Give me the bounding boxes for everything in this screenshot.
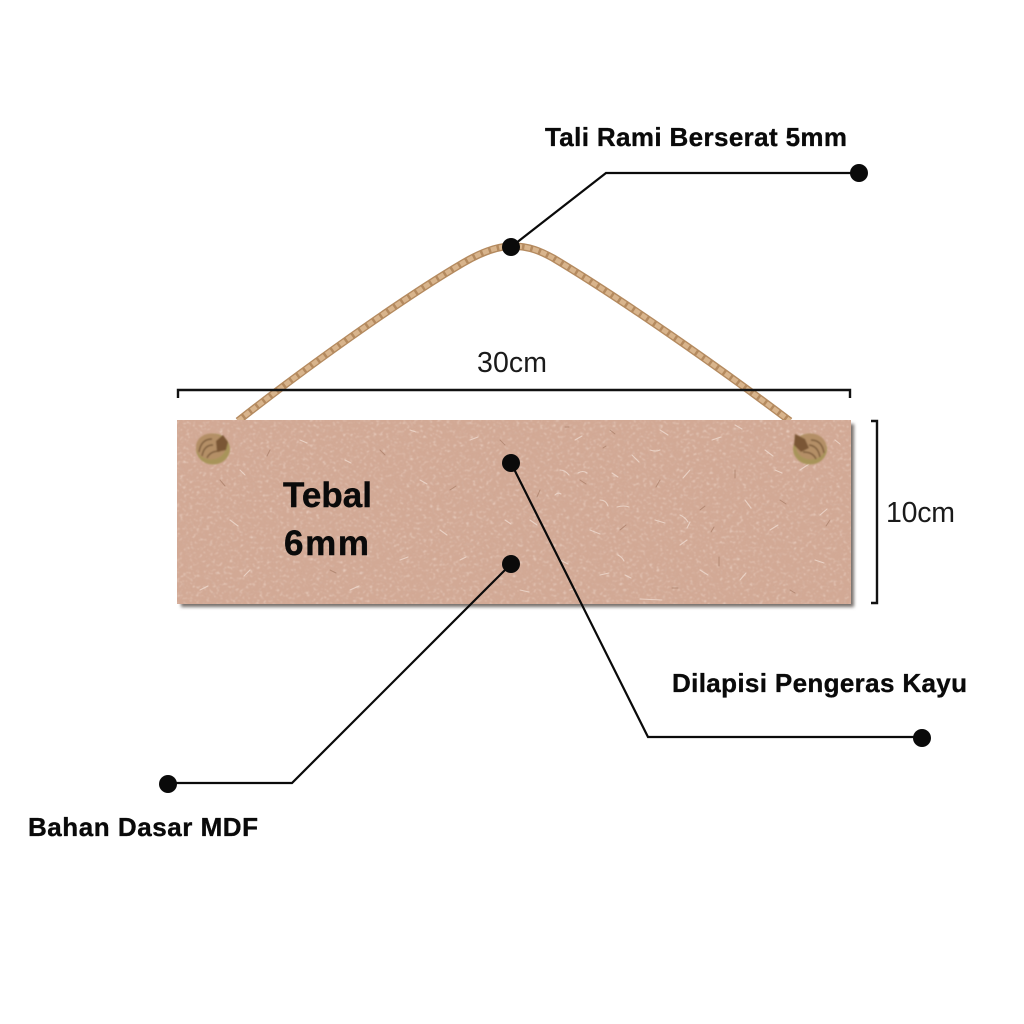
rope knot: left hole	[196, 434, 230, 464]
width dimension bracket	[178, 390, 850, 398]
callout: wood hardener coating: Dilapisi Pengeras Kayu	[672, 668, 967, 698]
thickness label: Tebal	[283, 476, 372, 515]
thickness label: 6mm	[284, 524, 369, 563]
rope: natural jute cord	[238, 246, 790, 421]
MDF board	[177, 420, 854, 607]
rope knot: right hole	[793, 434, 827, 464]
callout: wood hardener coating	[502, 454, 967, 747]
callout: rope	[502, 122, 868, 256]
height label: 10cm	[886, 497, 955, 529]
callout: rope: Tali Rami Berserat 5mm	[545, 122, 847, 152]
callout: MDF base material	[28, 555, 520, 842]
height dimension bracket	[871, 421, 877, 603]
callout: MDF base material: Bahan Dasar MDF	[28, 812, 258, 842]
thickness label	[283, 476, 372, 563]
width label: 30cm	[477, 347, 547, 379]
